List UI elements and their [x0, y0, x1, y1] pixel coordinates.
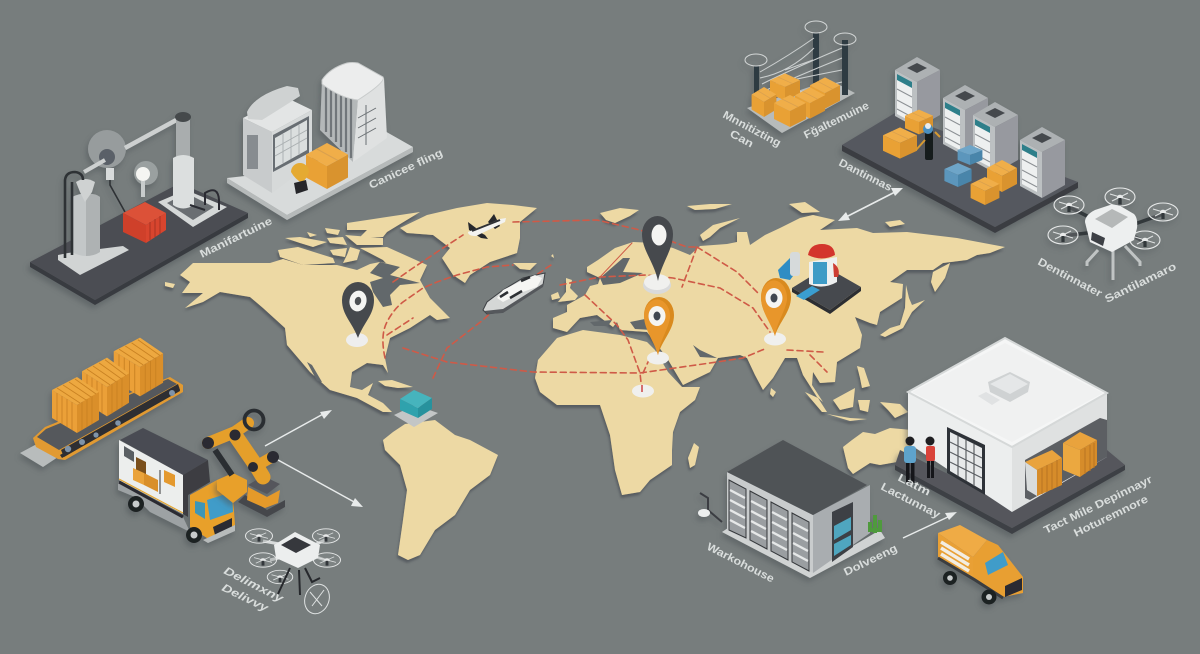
posts: [754, 66, 759, 94]
base: [643, 276, 671, 294]
right wall: [813, 485, 870, 573]
racks: [895, 57, 1065, 198]
cargo rear: [183, 460, 210, 517]
conveyor: [20, 338, 183, 467]
roller door: [947, 427, 985, 495]
wheels: [943, 571, 996, 604]
label: fulfilment: Fğaltemuine: [802, 100, 871, 142]
blue unit: [778, 258, 796, 280]
red dome: [808, 244, 835, 258]
base: [158, 190, 227, 227]
plane: [468, 214, 506, 239]
shipping routes: [383, 220, 827, 392]
arctic islands: [165, 212, 427, 288]
inland seas: [307, 258, 717, 382]
base: [764, 332, 786, 346]
fulfilment building: [895, 338, 1125, 534]
people: [904, 436, 935, 483]
blue tray: [796, 286, 820, 300]
label: customs: Canicee fling: [367, 147, 445, 192]
map pin: north europe: [642, 216, 673, 294]
orange pair: [971, 160, 1017, 205]
platform: [842, 145, 1078, 233]
world map: [165, 202, 1005, 560]
label: monitoring: Mnnitizting: [721, 109, 783, 150]
rings: [745, 21, 856, 66]
rotors: [1048, 188, 1178, 249]
south america: [383, 420, 498, 560]
wire globe: [301, 581, 333, 617]
warehouse: [698, 440, 885, 578]
legs: [278, 568, 320, 595]
caribbean: [378, 380, 413, 388]
label: delivery 2: Delivvy: [220, 582, 271, 615]
machine: [243, 118, 272, 193]
device: [294, 180, 308, 194]
arms: [1063, 200, 1163, 242]
crate right: [1063, 432, 1097, 477]
plant: manufacturing: [30, 112, 248, 305]
label: warehouse: Warkohouse: [705, 541, 776, 585]
cargo top: [120, 428, 208, 475]
platform: [792, 287, 861, 314]
person blue: [904, 436, 916, 483]
base: [722, 528, 885, 578]
right wall: [1012, 393, 1107, 512]
label: delivering: Dolveeng: [842, 542, 899, 579]
drone: bottom left: [246, 529, 340, 617]
links: [235, 435, 263, 477]
orange stack: [883, 110, 933, 159]
rooftop unit: [978, 372, 1030, 405]
africa: [535, 330, 700, 495]
label: hot items: Hoturemnore: [1072, 493, 1150, 540]
hose: [190, 190, 219, 210]
robot arm: [202, 410, 285, 517]
map pin: middle east: [644, 297, 674, 364]
label: latm: Latm: [896, 472, 933, 499]
roof: [908, 338, 1107, 447]
label: distribution: Dantinnas: [837, 157, 894, 194]
side pipe: [700, 493, 722, 522]
belt surface: [37, 379, 177, 450]
cargo side: [119, 440, 183, 514]
cargo: [938, 525, 987, 557]
wheels: [128, 496, 202, 543]
crate left: [1025, 450, 1062, 496]
rotors: [246, 529, 340, 584]
arrow: robot to americas north: [265, 410, 332, 446]
yellow pin: [291, 163, 309, 183]
column: [176, 117, 190, 162]
label: manufacturing: Manifartuine: [198, 215, 274, 261]
east asia islands: [770, 263, 950, 421]
label: last mile: Lactunnay: [879, 481, 943, 522]
tank funnel: [76, 179, 95, 202]
eurasia: [553, 215, 1005, 402]
pipe: [65, 172, 83, 258]
red container: [123, 202, 166, 243]
label: sanitation: Santilamaro: [1103, 261, 1179, 306]
north america: [180, 259, 450, 412]
pedestal strip: [58, 246, 129, 275]
madagascar: [688, 443, 699, 468]
chassis: [118, 482, 190, 532]
legs: [1087, 246, 1140, 280]
small orange truck: [938, 525, 1023, 604]
chassis: [938, 558, 1003, 598]
small factory on map: [778, 244, 861, 314]
base: [238, 495, 285, 517]
left wall: [727, 472, 813, 573]
drone: top right: [1048, 188, 1178, 280]
cable: [110, 170, 125, 212]
tube: [809, 257, 837, 287]
bulb: [134, 161, 158, 197]
delivery truck: [118, 428, 235, 543]
arms: [263, 540, 325, 560]
boxes: [752, 73, 840, 127]
plate: [747, 80, 855, 133]
iceland, uk, arctic archipelagos: [513, 202, 905, 302]
cab: [190, 480, 235, 540]
orange box: [306, 143, 348, 189]
platform: [30, 213, 248, 305]
arm: [84, 160, 105, 172]
greenland: [400, 203, 537, 283]
blue stack: [944, 145, 982, 187]
label: delivery 1: Delimxny: [222, 565, 286, 606]
worker: [916, 123, 940, 160]
left wall: [908, 392, 1012, 512]
crates: [52, 338, 163, 433]
platform: [227, 147, 413, 220]
australia: [843, 428, 912, 474]
platform: [895, 465, 1125, 534]
disc: [88, 130, 126, 168]
gripper: [244, 410, 264, 430]
belt side: [60, 387, 180, 458]
belt frame: [33, 377, 183, 460]
arrow: delivery: [903, 512, 957, 538]
cactus: [870, 515, 880, 533]
rollers: [65, 390, 175, 452]
label: destination: Dentinnater: [1036, 256, 1105, 300]
plug: [106, 168, 114, 180]
person red: [926, 436, 935, 478]
teal container: [394, 390, 438, 427]
base: [346, 333, 368, 347]
cab: [973, 540, 1023, 597]
map pin base: africa: [632, 384, 654, 398]
bay: [1025, 418, 1107, 500]
screen: [273, 116, 309, 172]
wires: [760, 38, 842, 92]
ship: [483, 273, 545, 314]
label: can: Can: [728, 128, 756, 151]
arrow: robot to americas south: [278, 460, 363, 507]
cube: [217, 473, 247, 503]
plant: customs: [227, 62, 413, 220]
arrow: hub to asia: [838, 188, 903, 221]
tower: [320, 80, 358, 162]
joints: [202, 430, 279, 472]
body: [1085, 205, 1137, 252]
louvres: [729, 480, 809, 571]
map pin: south asia: [761, 278, 791, 346]
map pin: north america: [342, 282, 374, 347]
distribution hub: [842, 57, 1078, 233]
roof: [727, 440, 867, 515]
base: [647, 352, 669, 364]
tank: [72, 194, 100, 256]
door: [832, 502, 853, 562]
label: last mile delivery: Tact Mile Depinnayr: [1042, 473, 1155, 537]
body: [274, 532, 320, 568]
steps: [20, 445, 58, 467]
fence yard: [745, 21, 856, 133]
